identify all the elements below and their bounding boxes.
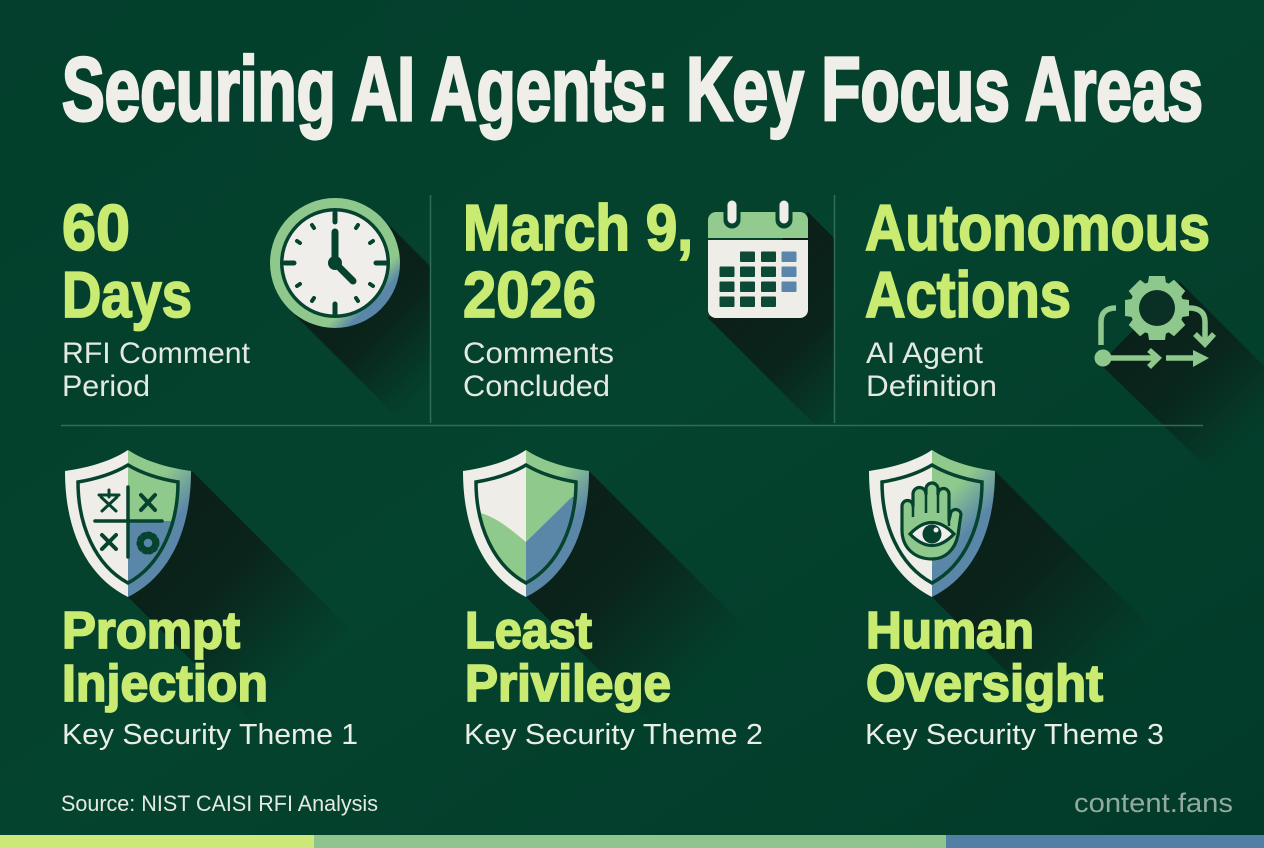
panel: prompt injection — [62, 450, 358, 751]
theme caption: Key Security Theme 2 — [464, 719, 763, 751]
icon: clock — [270, 198, 400, 328]
theme heading: Prompt Injection: Prompt — [62, 602, 240, 660]
stat heading: March 9, 2026 — [463, 191, 693, 331]
theme heading: Prompt Injection — [62, 602, 268, 713]
theme heading: Human Oversight — [866, 602, 1103, 713]
theme caption: Key Security Theme 3 — [865, 719, 1164, 751]
theme heading: Human Oversight: Human — [866, 602, 1034, 660]
stat heading: March 9, 2026: March 9, — [463, 191, 693, 264]
theme heading: Least Privilege: Least — [465, 602, 592, 660]
stat heading: 60 Days: 60 — [62, 191, 130, 264]
panel: human oversight — [865, 450, 1164, 751]
icon: gear with workflow arrows — [1094, 276, 1214, 367]
panel: 60 days — [62, 191, 400, 403]
stat heading: Autonomous Actions — [865, 191, 1210, 331]
stat caption: RFI comment period — [62, 337, 251, 403]
theme heading: Least Privilege: Privilege — [465, 655, 671, 713]
stat heading: 60 Days: Days — [62, 258, 192, 331]
stat caption: AI agent definition: AI Agent — [866, 337, 984, 370]
stat caption: RFI comment period: RFI Comment — [62, 337, 251, 370]
stat heading: Autonomous Actions: Actions — [865, 258, 1071, 331]
brand mark: content.fans — [1074, 788, 1233, 818]
icon: shield with prompt symbols — [65, 450, 191, 597]
stat caption: AI agent definition — [866, 337, 997, 403]
stat heading: March 9, 2026: 2026 — [463, 258, 596, 331]
stat caption: comments concluded: Comments — [463, 337, 614, 370]
theme heading: Prompt Injection: Injection — [62, 655, 268, 713]
panel: least privilege — [463, 450, 763, 751]
panel: autonomous actions — [865, 191, 1214, 403]
stat caption: AI agent definition: Definition — [866, 370, 997, 403]
stat caption: comments concluded: Concluded — [463, 370, 610, 403]
panel: March 9, 2026 — [463, 191, 808, 403]
theme heading: Least Privilege — [465, 602, 671, 713]
source note: Source: NIST CAISI RFI Analysis — [61, 791, 378, 816]
icon: calendar — [708, 205, 808, 318]
theme caption: Key Security Theme 1 — [62, 719, 358, 751]
stat caption: comments concluded — [463, 337, 614, 403]
footer colour bar — [0, 835, 1264, 848]
stat heading: 60 Days — [62, 191, 192, 331]
stat heading: Autonomous Actions: Autonomous — [865, 191, 1210, 264]
stat caption: RFI comment period: Period — [62, 370, 150, 403]
icon: shield with chevron — [463, 450, 589, 600]
theme heading: Human Oversight: Oversight — [866, 655, 1103, 713]
icon: shield with hand and eye — [869, 450, 995, 597]
